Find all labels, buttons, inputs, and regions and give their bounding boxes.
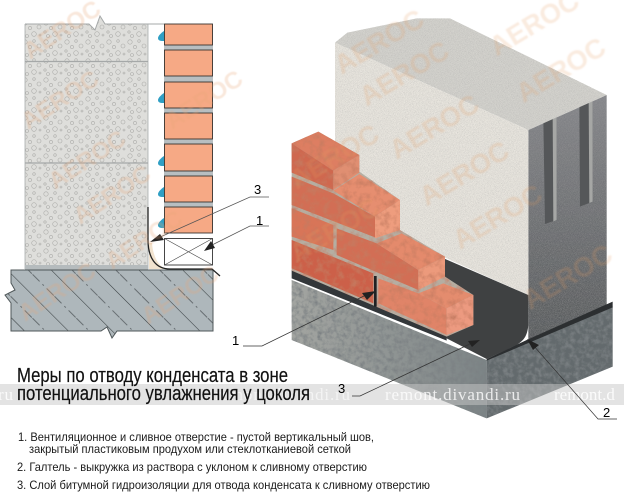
fourth course [292, 240, 473, 335]
leader 1 [204, 213, 269, 251]
numbered legend: 2. Галтель - выкружка из раствора с уклоном к сливному отверстию [17, 460, 367, 474]
watermarks on section: AEROC [161, 65, 248, 135]
title [17, 365, 310, 405]
block front face [335, 43, 528, 295]
watermarks on section: AEROC [17, 65, 104, 135]
callout 1 on 3D view [232, 291, 376, 348]
watermarks on block: AEROC [384, 88, 484, 165]
aerated concrete block wall [25, 16, 164, 270]
top brick [292, 132, 359, 190]
section drawing: left wall detail [5, 0, 269, 338]
callout 3 on 3D view [338, 340, 480, 396]
watermarks on section: AEROC [44, 125, 131, 195]
leader 3 [150, 182, 269, 242]
watermarks on block: AEROC [329, 3, 429, 80]
callout 2 on 3D view [527, 339, 617, 420]
watermark band [0, 384, 624, 405]
numbered legend: закрытый пластиковым продухом или стеклотканиевой сеткой [29, 442, 351, 456]
condensate drops [158, 31, 164, 228]
plinth [292, 280, 613, 418]
watermarks on section: AEROC [101, 205, 188, 275]
fillet mortar [149, 243, 166, 269]
brick veneer courses [164, 24, 213, 233]
watermark band: remont.divandi.ru [215, 385, 350, 404]
watermark band: remont.d [554, 385, 615, 404]
title: потенциального увлажнения у цоколя [17, 383, 310, 405]
watermarks on section: AEROC [14, 257, 101, 327]
watermarks on block [284, 0, 618, 315]
watermarks on block: AEROC [284, 118, 384, 195]
numbered legend: 3. Слой битумной гидроизоляции для отвода конденсата к сливному отверстию [17, 478, 430, 492]
watermarks on block: AEROC [414, 134, 514, 212]
bitumen waterproofing layer [292, 247, 613, 361]
block end face with grooves [528, 95, 607, 342]
numbered legend: 1. Вентиляционное и сливное отверстие - пустой вертикальный шов, [18, 430, 374, 444]
watermarks on section: AEROC [137, 260, 224, 330]
watermarks on block: AEROC [510, 31, 611, 108]
callout 1 on 3D view: 1 [232, 333, 239, 348]
leader 3: 3 [254, 182, 261, 197]
title: Меры по отводу конденсата в зоне [17, 365, 288, 387]
drain slot [374, 276, 377, 307]
watermarks on section: AEROC [69, 160, 156, 230]
vent box with cross [164, 238, 212, 265]
callout 2 on 3D view: 2 [603, 405, 610, 420]
leader 1: 1 [256, 213, 263, 228]
second course [292, 174, 400, 238]
watermarks on section [14, 0, 248, 330]
block top face [335, 18, 607, 130]
watermarks on block: AEROC [517, 238, 618, 315]
waterproofing membrane [148, 207, 220, 276]
3D view of wall assembly [284, 0, 618, 418]
third course [292, 208, 445, 290]
watermarks on block: AEROC [447, 178, 548, 255]
watermark band: remont.divandi.ru [385, 385, 520, 404]
numbered legend [17, 430, 430, 492]
watermarks on block: AEROC [354, 34, 454, 112]
callout 3 on 3D view: 3 [338, 381, 345, 396]
watermarks on block: AEROC [284, 191, 384, 268]
brickwork [292, 132, 473, 337]
foundation slab with hatching [5, 270, 213, 338]
